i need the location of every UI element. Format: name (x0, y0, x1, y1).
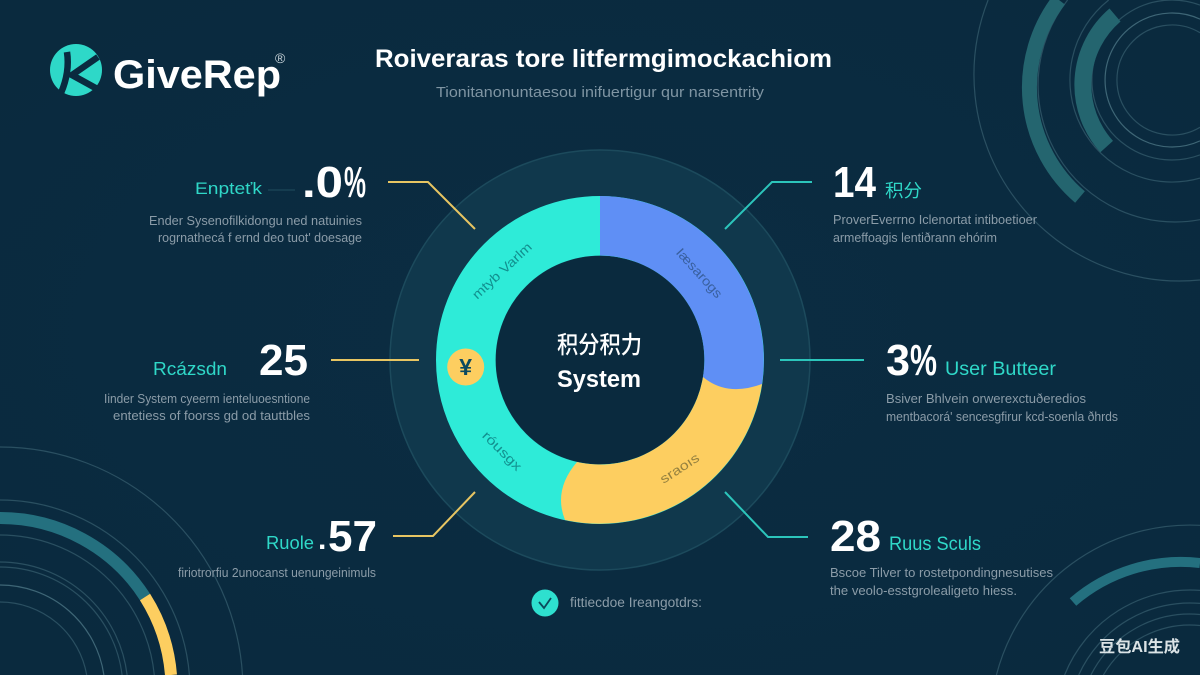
icon: check badge (532, 590, 558, 616)
center label: System (557, 366, 641, 393)
segment: blue (600, 196, 764, 389)
connector: bottom left (393, 492, 475, 536)
connector: middle right (780, 359, 864, 361)
subtitle: Tionitanonuntaesou inifuertigur qur narsentrity (436, 84, 765, 101)
callout: top right: ProverEverrno Iclenortat intiboetioer (833, 212, 1038, 227)
decorative rings: bottom right (996, 525, 1200, 675)
callout: top left: rogrnathecá f ernd deo tuot' doesage (158, 230, 362, 245)
callout: top right: armeffoagis lentiðrann ehórim (833, 230, 997, 245)
watermark: 豆包AI生成 (1099, 637, 1180, 656)
connector: top right (725, 182, 812, 229)
callout: middle right: 3 (886, 336, 910, 385)
callout: middle right: % (910, 336, 937, 385)
callout: top right: 积分 (885, 181, 922, 201)
footer note (532, 590, 702, 616)
callout: middle right: mentbacorá' sencesgfirur kcd-soenla ðhrds (886, 409, 1118, 424)
icon: yen badge: ¥ (459, 354, 472, 380)
callout: bottom right: the veolo-esstgrolealigeto hiess. (830, 583, 1017, 598)
callout: middle left: Iinder System cyeerm ienteluoesntione (104, 391, 310, 406)
callout: top right: 14 (833, 158, 876, 207)
title: Roiveraras tore litfermgimockachiom (375, 45, 832, 73)
connector: middle left (331, 359, 419, 361)
segment label: yellow: sraoıs (657, 450, 703, 486)
donut chart (447, 196, 764, 524)
callout: bottom left: . (318, 523, 326, 556)
brand name: GiveRep (113, 53, 281, 97)
segment: yellow (561, 377, 762, 524)
callout: middle left (104, 336, 310, 423)
icon: logo mark (50, 44, 102, 96)
callout: top left: Enpteťk (195, 179, 263, 198)
connector: top left (388, 182, 475, 229)
callout: bottom right: Bscoe Tilver to rostetpondingnesutises (830, 565, 1053, 580)
callout: top left: .0 (302, 158, 343, 207)
callout: bottom right: 28 (830, 512, 881, 561)
center label: 积分积力 (557, 332, 642, 359)
callout: middle right (886, 336, 1118, 424)
decorative rings: bottom left (0, 447, 242, 675)
center hole (496, 256, 704, 464)
callout: middle right: Bsiver Bhlvein orwerexctuðeredios (886, 391, 1086, 406)
callout: bottom right: Ruus Sculs (889, 534, 981, 555)
callout: middle left: entetiess of foorss gd od tauttbles (113, 408, 310, 423)
callout: bottom right (830, 512, 1053, 598)
callout: middle right: User Butteer (945, 359, 1057, 380)
callout: top left (149, 158, 366, 245)
connector: bottom right (725, 492, 808, 537)
registered mark: ® (275, 50, 286, 66)
callout: top left: Ender Sysenofilkidongu ned natuinies (149, 213, 362, 228)
callout: bottom left: 57 (328, 512, 377, 561)
callout: bottom left: Ruole (266, 533, 314, 553)
callout: top right (833, 158, 1038, 245)
segment label: teal upper: mtyb Varlm (469, 239, 535, 302)
callout: middle left: 25 (259, 336, 308, 385)
callout: middle left: Rcázsdn (153, 359, 227, 379)
footer text: fittiecdoe Ireangotdrs: (570, 595, 702, 610)
callout: bottom left (178, 512, 377, 580)
callout: bottom left: firiotrorfiu 2unocanst uenungeinimuls (178, 565, 376, 580)
icon: yen badge (447, 348, 484, 386)
logo: GiveRep (50, 44, 286, 97)
segment: teal (466, 226, 734, 494)
decorative rings: top right (974, 0, 1200, 281)
segment label: teal lower: róusgx (479, 428, 526, 474)
center label (557, 332, 642, 393)
callout: top left: % (344, 158, 366, 207)
segment label: blue: Iæsarogs (673, 245, 726, 301)
donut halo (390, 150, 810, 570)
